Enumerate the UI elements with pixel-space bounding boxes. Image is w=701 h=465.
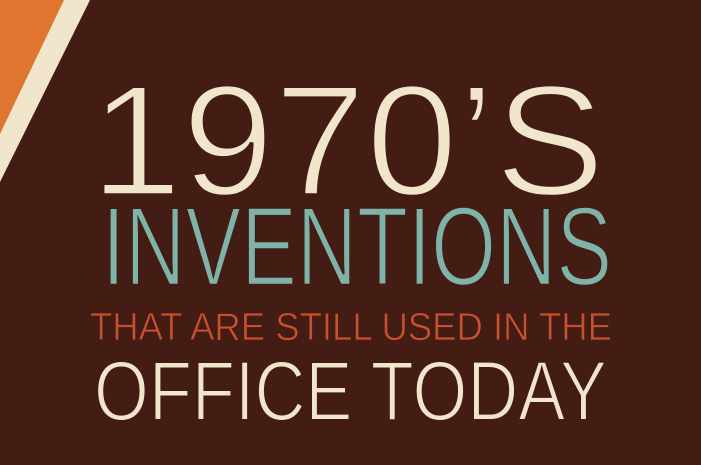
decoration: orange triangle bbox=[0, 0, 64, 134]
title: 1970'S: 1970’S bbox=[90, 53, 605, 229]
subheading: that are still used in the: THAT ARE STILL USED IN THE bbox=[90, 306, 612, 349]
decoration: cream stripe bbox=[0, 0, 90, 182]
heading: OFFICE TODAY: OFFICE TODAY bbox=[94, 344, 607, 438]
